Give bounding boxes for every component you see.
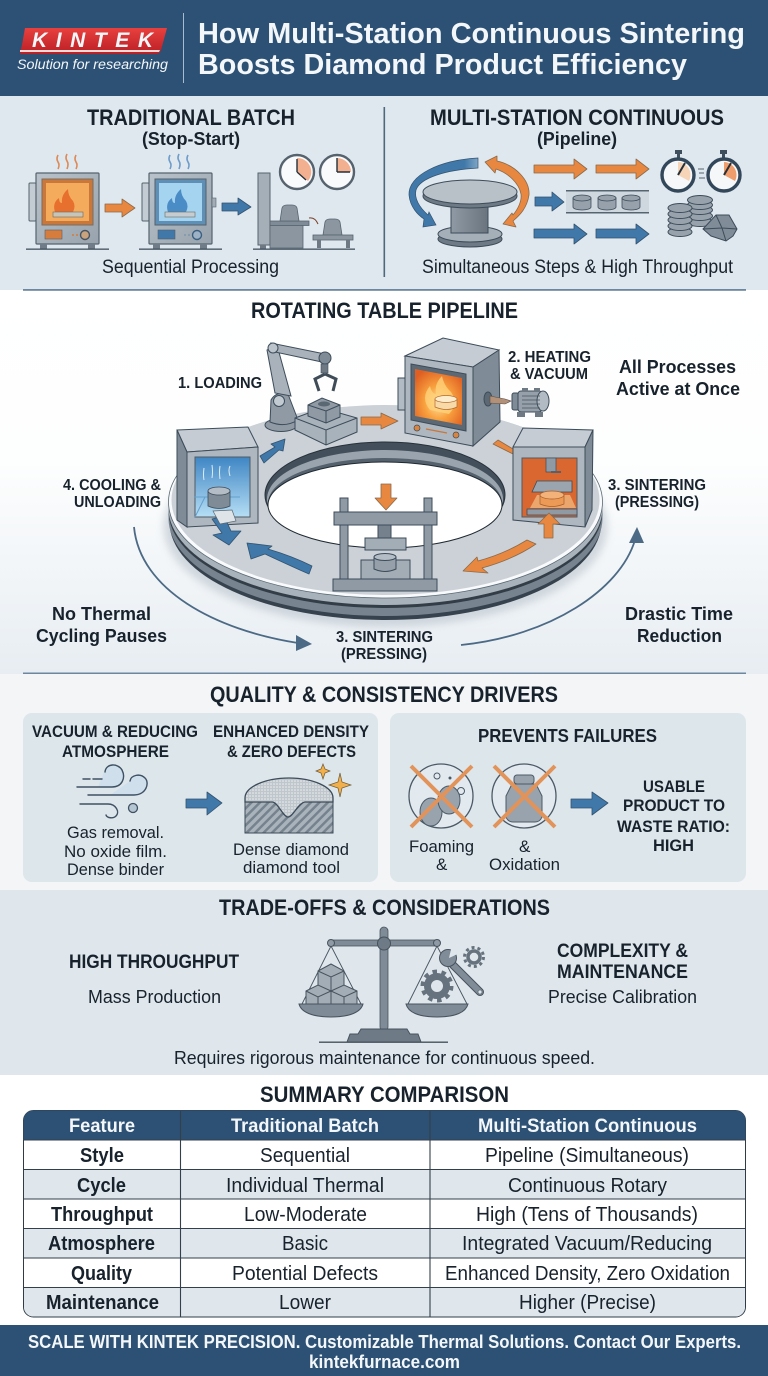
heading: summary comparison: SUMMARY COMPARISON bbox=[260, 1082, 509, 1107]
text: foaming: & bbox=[436, 855, 448, 874]
row: maintenance: Higher (Precise) bbox=[519, 1292, 656, 1314]
icon: product stacks and diamond bbox=[668, 196, 737, 241]
callout: drastic time reduction: Drastic Time bbox=[625, 604, 733, 624]
heading: QUALITY & CONSISTENCY DRIVERS bbox=[210, 682, 558, 707]
text: gas removal: Dense binder bbox=[67, 860, 164, 879]
arrow: up into sintering bbox=[538, 513, 560, 538]
arrows: pipeline flow bbox=[534, 159, 649, 244]
footer band: kintekfurnace.com bbox=[309, 1352, 460, 1372]
icon: hot furnace bbox=[26, 154, 109, 250]
text: oxidation: Oxidation bbox=[489, 855, 560, 874]
row: throughput: Throughput bbox=[51, 1204, 153, 1226]
heading: multi-station continuous: MULTI-STATION CONTINUOUS bbox=[430, 105, 724, 130]
panel: atmosphere and density bbox=[23, 713, 378, 882]
header band bbox=[0, 0, 768, 96]
logo bbox=[17, 28, 169, 72]
station 4: cooling cabinet bbox=[177, 427, 258, 545]
text: complexity and maintenance: Precise Calibration bbox=[548, 987, 697, 1007]
arrow: orange bbox=[105, 199, 135, 217]
row: throughput bbox=[51, 1204, 698, 1226]
label: loading: 1. LOADING bbox=[178, 375, 262, 392]
heading: traditional batch: TRADITIONAL BATCH bbox=[87, 105, 295, 130]
label: sintering right: 3. SINTERING bbox=[608, 477, 706, 494]
station 3: center press bbox=[333, 484, 437, 591]
text: dense diamond tool: Dense diamond bbox=[233, 840, 349, 859]
label: cooling and unloading: UNLOADING bbox=[74, 494, 161, 511]
footer band bbox=[0, 1325, 768, 1376]
icon: oxidation crossed out bbox=[492, 764, 556, 828]
logo: KINTEK bbox=[32, 29, 155, 52]
row: atmosphere: Integrated Vacuum/Reducing bbox=[462, 1233, 712, 1255]
text: high throughput: HIGH THROUGHPUT bbox=[69, 952, 239, 973]
text: vacuum heading: VACUUM & REDUCING bbox=[32, 722, 198, 741]
arrow: blue bbox=[222, 198, 251, 215]
text: complexity and maintenance: MAINTENANCE bbox=[557, 962, 688, 983]
row: style bbox=[80, 1145, 689, 1167]
heading: traditional batch: (Stop-Start) bbox=[142, 129, 240, 149]
arrow: curved blue bbox=[247, 543, 312, 574]
title bbox=[198, 18, 745, 81]
table header: Multi-Station Continuous bbox=[478, 1116, 697, 1137]
section: quality and consistency drivers bbox=[0, 674, 768, 890]
icon: unloading machine and clocks bbox=[253, 155, 355, 250]
row: style: Pipeline (Simultaneous) bbox=[485, 1145, 689, 1167]
callout: no thermal cycling pauses bbox=[36, 604, 167, 646]
heading: traditional batch bbox=[87, 105, 295, 149]
icon: balance scale bbox=[299, 927, 484, 1043]
text: vacuum heading: ATMOSPHERE bbox=[62, 742, 169, 761]
callout: all processes active: Active at Once bbox=[616, 379, 740, 399]
big cycle arrow: right bbox=[461, 527, 644, 645]
label: sintering right: (PRESSING) bbox=[615, 494, 699, 511]
text: density heading bbox=[213, 722, 370, 761]
row: cycle: Cycle bbox=[77, 1175, 126, 1197]
icon: dense diamond dome bbox=[245, 764, 351, 833]
row: style: Sequential bbox=[260, 1145, 350, 1167]
title: Boosts Diamond Product Efficiency bbox=[198, 49, 687, 81]
text: complexity and maintenance bbox=[548, 941, 697, 1007]
station 3: sintering cabinet bbox=[513, 428, 593, 527]
big cycle arrow: left bbox=[134, 527, 312, 651]
icon: stopwatches bbox=[662, 150, 740, 191]
callout: drastic time reduction: Reduction bbox=[637, 626, 722, 646]
row: cycle bbox=[77, 1175, 667, 1197]
icon: foaming crossed out bbox=[409, 764, 473, 828]
icon: cooling furnace bbox=[139, 154, 222, 250]
panel: prevents failures bbox=[390, 713, 746, 882]
arrow: back to loading bbox=[260, 439, 285, 463]
text: high throughput bbox=[69, 952, 239, 1007]
panel: traditional vs continuous comparison: Sequential Processing bbox=[102, 257, 279, 278]
panel: traditional vs continuous comparison: Simultaneous Steps & High Throughput bbox=[422, 257, 734, 278]
text: usable ratio: WASTE RATIO: bbox=[617, 817, 730, 836]
arrow: loading to heating bbox=[361, 413, 398, 429]
arrow: heating to sintering bbox=[493, 440, 513, 454]
panel: rotating table pipeline bbox=[0, 289, 768, 674]
table header: Traditional Batch bbox=[231, 1116, 379, 1137]
row: atmosphere: Atmosphere bbox=[48, 1233, 155, 1255]
row: atmosphere bbox=[48, 1233, 712, 1255]
text: high throughput: Mass Production bbox=[88, 987, 221, 1007]
row: throughput: Low-Moderate bbox=[244, 1204, 367, 1226]
callout: drastic time reduction bbox=[625, 604, 733, 646]
text: usable ratio: PRODUCT TO bbox=[623, 796, 725, 815]
row: atmosphere: Basic bbox=[282, 1233, 328, 1255]
text: vacuum heading bbox=[32, 722, 198, 761]
row: maintenance: Lower bbox=[279, 1292, 331, 1314]
station 2: heating furnace bbox=[398, 338, 500, 446]
row: maintenance bbox=[46, 1292, 656, 1314]
text: density heading: ENHANCED DENSITY bbox=[213, 722, 370, 741]
arrow: blue bbox=[186, 792, 222, 815]
text: foaming bbox=[409, 837, 474, 874]
callout: no thermal cycling pauses: Cycling Pauses bbox=[36, 626, 167, 646]
text: complexity and maintenance: COMPLEXITY & bbox=[557, 941, 688, 962]
panel: trade-offs and considerations bbox=[0, 890, 768, 1075]
row: quality: Quality bbox=[71, 1263, 133, 1285]
table header: Feature bbox=[69, 1116, 135, 1137]
text: dense diamond tool bbox=[233, 840, 349, 877]
callout: no thermal cycling pauses: No Thermal bbox=[52, 604, 151, 624]
row: throughput: High (Tens of Thousands) bbox=[476, 1204, 698, 1226]
arrow: blue bbox=[571, 792, 608, 815]
row: cycle: Continuous Rotary bbox=[508, 1175, 667, 1197]
text: usable ratio bbox=[617, 777, 730, 855]
label: heating and vacuum bbox=[508, 349, 591, 383]
text: gas removal bbox=[64, 823, 167, 879]
label: sintering bottom: (PRESSING) bbox=[341, 646, 427, 663]
text: density heading: & ZERO DEFECTS bbox=[227, 742, 356, 761]
heading: ROTATING TABLE PIPELINE bbox=[251, 298, 518, 323]
row: quality: Enhanced Density, Zero Oxidation bbox=[445, 1263, 730, 1285]
text: dense diamond tool: diamond tool bbox=[243, 858, 340, 877]
label: sintering right bbox=[608, 477, 706, 511]
row: style: Style bbox=[80, 1145, 124, 1167]
text: gas removal: No oxide film. bbox=[64, 842, 167, 861]
callout: all processes active: All Processes bbox=[619, 357, 736, 377]
icon: rotary table with arrows bbox=[409, 156, 529, 247]
text: usable ratio: HIGH bbox=[653, 836, 694, 855]
heading: PREVENTS FAILURES bbox=[478, 726, 657, 746]
callout: all processes active bbox=[616, 357, 740, 399]
row: quality bbox=[71, 1263, 730, 1285]
table: summary comparison bbox=[24, 1110, 746, 1317]
text: usable ratio: USABLE bbox=[643, 777, 705, 796]
text: foaming: Foaming bbox=[409, 837, 474, 856]
heading: multi-station continuous bbox=[430, 105, 724, 149]
arrow: curved orange bbox=[463, 540, 536, 573]
icon: wind bbox=[77, 765, 147, 818]
heading: multi-station continuous: (Pipeline) bbox=[537, 129, 617, 149]
rotating ring table bbox=[164, 405, 608, 627]
label: cooling and unloading: 4. COOLING & bbox=[63, 477, 161, 494]
text: oxidation: & bbox=[519, 837, 531, 856]
title: How Multi-Station Continuous Sintering bbox=[198, 18, 745, 50]
table header bbox=[69, 1116, 697, 1137]
row: maintenance: Maintenance bbox=[46, 1292, 159, 1314]
heading: TRADE-OFFS & CONSIDERATIONS bbox=[219, 895, 550, 920]
label: heating and vacuum: & VACUUM bbox=[510, 366, 588, 383]
station 1: loading robot bbox=[265, 343, 357, 445]
text: gas removal: Gas removal. bbox=[67, 823, 164, 842]
text: oxidation bbox=[489, 837, 560, 874]
row: quality: Potential Defects bbox=[232, 1263, 378, 1285]
panel: traditional vs continuous comparison bbox=[0, 96, 768, 290]
label: sintering bottom bbox=[336, 629, 433, 663]
label: heating and vacuum: 2. HEATING bbox=[508, 349, 591, 366]
icon: vacuum pump bbox=[484, 388, 549, 417]
row: cycle: Individual Thermal bbox=[226, 1175, 384, 1197]
icon: parts on conveyor bbox=[566, 190, 649, 214]
text: maintenance note: Requires rigorous maintenance for continuous speed. bbox=[174, 1048, 595, 1068]
label: cooling and unloading bbox=[63, 477, 161, 511]
logo: Solution for researching bbox=[17, 57, 169, 72]
label: sintering bottom: 3. SINTERING bbox=[336, 629, 433, 646]
